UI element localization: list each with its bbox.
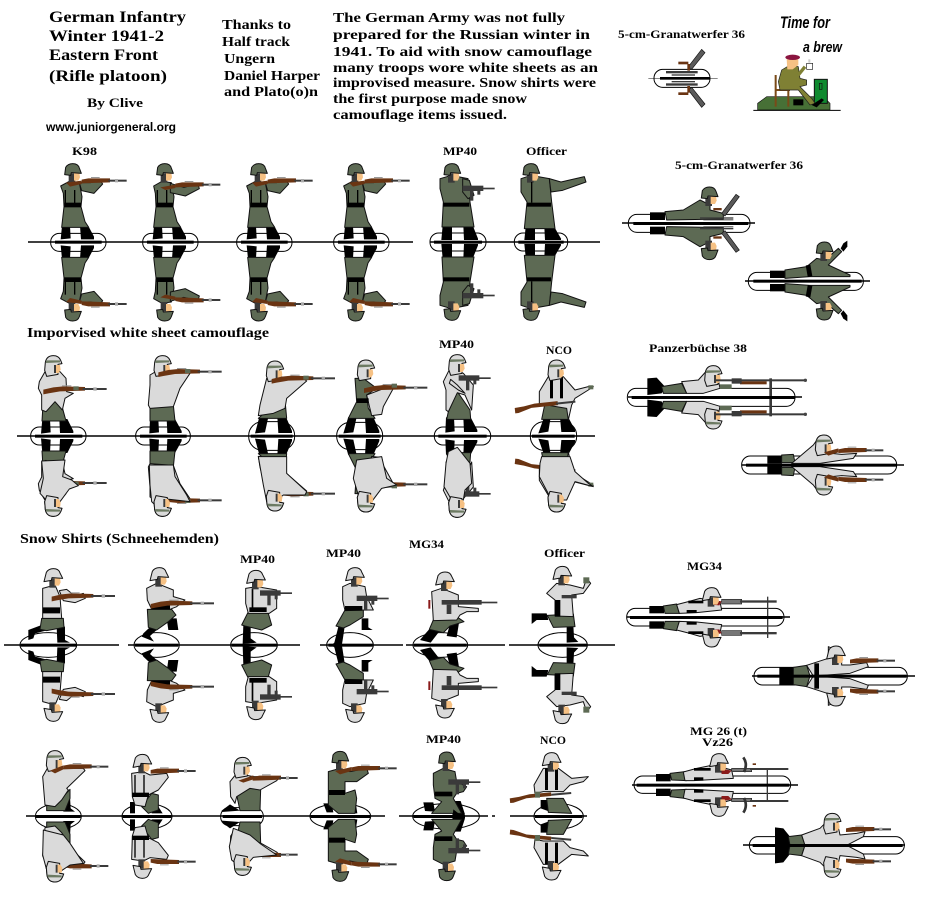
- icon: soldier having a brew: [753, 55, 841, 110]
- label: mortar top: 5-cm-Granatwerfer 36: [618, 27, 745, 41]
- label: MG34: MG34: [409, 537, 444, 551]
- figure: snow shirt MP40 running 2: [327, 568, 389, 722]
- introduction text block: prepared for the Russian winter in: [333, 27, 591, 42]
- figure: sheet rifleman prone: [742, 435, 897, 495]
- figure: K98 rifleman 1: [51, 164, 127, 321]
- label: MP40: MP40: [240, 552, 275, 566]
- icon: top mortar counter: [648, 49, 718, 107]
- thanks text block: and Plato(o)n: [224, 84, 319, 99]
- heading: snow shirts: Snow Shirts (Schneehemden): [20, 531, 219, 546]
- figure: kneeling sheet rifleman 1: [35, 751, 108, 882]
- figure: snow shirt rifleman running 1: [20, 569, 115, 721]
- label: MG34 prone: MG34: [687, 559, 722, 573]
- figure: MG 26 gunner prone: [634, 754, 791, 816]
- figure: sheet rifleman prone 2: [749, 813, 904, 877]
- label: MP40: MP40: [443, 144, 477, 158]
- label: K98: K98: [72, 144, 97, 158]
- figure: MP40 gunner: [430, 164, 495, 320]
- label: MG 26: MG 26 (t): [690, 724, 747, 738]
- label: mortar crew: 5-cm-Granatwerfer 36: [675, 158, 803, 172]
- figure: kneeling MP40 gunner: [413, 752, 480, 881]
- introduction text block: 1941. To aid with snow camouflage: [333, 44, 592, 59]
- figure: sheet rifleman 2: [136, 356, 222, 516]
- thanks text block: Thanks to: [222, 17, 291, 32]
- figure: kneeling snow shirt rifleman: [122, 754, 196, 878]
- row baselines: [4, 223, 915, 845]
- figure: mortar crew signalling: [748, 241, 863, 321]
- introduction text block: [333, 10, 599, 122]
- figure: sheet rifleman 3: [249, 361, 335, 511]
- introduction text block: camouflage items issued.: [333, 107, 507, 122]
- figure: kneeling snow shirt NCO: [510, 753, 588, 880]
- figure: K98 rifleman 3: [237, 164, 313, 321]
- figure: snow shirt MP40 running 1: [231, 570, 292, 720]
- title: [49, 9, 186, 85]
- brew caption: Time for: [780, 13, 831, 32]
- figure: snow shirt MG34 running: [413, 572, 497, 718]
- label: NCO: NCO: [540, 733, 566, 747]
- figure: officer pointing: [514, 164, 586, 320]
- brew caption: [780, 13, 843, 56]
- label: MG 26: Vz26: [702, 735, 733, 749]
- label: Panzerbuchse: Panzerbüchse 38: [649, 341, 747, 355]
- introduction text block: improvised measure. Snow shirts were: [333, 75, 596, 90]
- thanks text block: Daniel Harper: [224, 68, 320, 83]
- label: NCO: NCO: [546, 343, 572, 357]
- figure: snow shirt officer running: [532, 566, 591, 724]
- author credit: By Clive: [87, 95, 143, 110]
- thanks text block: [222, 17, 320, 99]
- label: MG 26: [690, 724, 747, 749]
- figure: kneeling sheet rifleman 2: [221, 757, 298, 875]
- label: Officer: Officer: [526, 144, 568, 158]
- introduction text block: The German Army was not fully: [333, 10, 565, 25]
- figure: K98 rifleman 2: [143, 164, 220, 321]
- figure: sheet rifleman 1: [31, 356, 107, 516]
- figure: sheet rifleman 4: [337, 360, 427, 512]
- title: Winter 1941-2: [49, 28, 164, 45]
- figure: sheet NCO: [514, 360, 593, 512]
- label: MP40: MP40: [426, 732, 461, 746]
- thanks text block: Ungern: [224, 51, 276, 66]
- title: (Rifle platoon): [49, 68, 167, 85]
- introduction text block: the first purpose made snow: [333, 91, 527, 106]
- introduction text block: many troops wore white sheets as an: [333, 60, 599, 75]
- title: German Infantry: [49, 9, 186, 26]
- brew caption: a brew: [803, 39, 843, 56]
- figure: snow shirt rifleman running 2: [134, 568, 214, 722]
- thanks text block: Half track: [222, 34, 291, 49]
- label: MP40: MP40: [326, 546, 361, 560]
- heading: white sheet camouflage: Imporvised white sheet camouflage: [27, 325, 269, 340]
- figure: mortar operator prone: [628, 187, 750, 260]
- figure: anti-tank rifle prone: [627, 366, 807, 429]
- label: MP40: MP40: [439, 337, 474, 351]
- title: Eastern Front: [49, 47, 159, 64]
- figure: K98 rifleman 4: [334, 164, 410, 321]
- figure: sheet MP40 gunner: [434, 355, 491, 517]
- figure: kneeling grey rifleman: [310, 751, 397, 881]
- figure: snow shirt rifleman prone: [754, 646, 907, 706]
- figure: MG34 gunner prone: [627, 588, 784, 647]
- website: www.juniorgeneral.org: [45, 122, 176, 134]
- label: Officer: Officer: [544, 546, 586, 560]
